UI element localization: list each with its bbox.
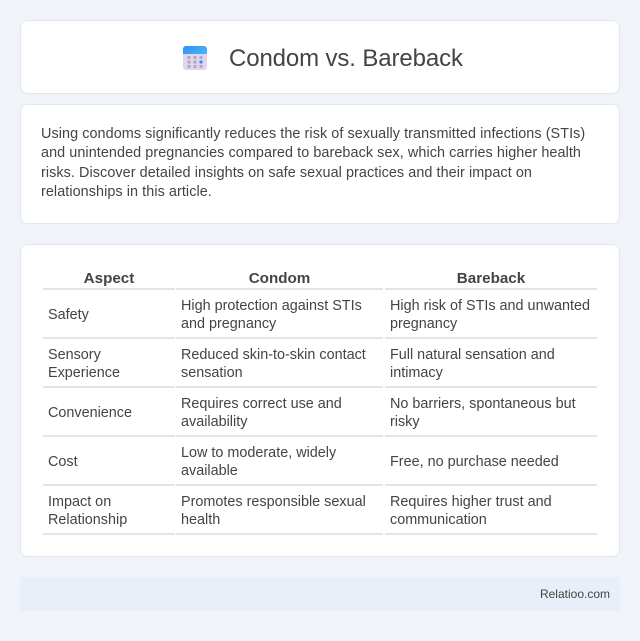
panel: title card <box>20 20 620 94</box>
row: sensory experience: Sensory <box>48 347 101 363</box>
row: impact on relationship: Relationship <box>48 512 127 528</box>
row: cost: Cost <box>48 454 78 470</box>
icon: calendar <box>183 46 207 70</box>
intro paragraph: Using condoms significantly reduces the risk of sexually transmitted infections (STIs) <box>41 126 585 142</box>
intro paragraph: risks. Discover detailed insights on safe sexual practices and their impact on <box>41 165 532 181</box>
intro paragraph: relationships in this article. <box>41 184 212 200</box>
row: impact on relationship: health <box>181 512 220 528</box>
row: impact on relationship <box>43 494 597 535</box>
row: sensory experience: Reduced skin-to-skin contact <box>181 347 366 363</box>
panel: intro text <box>20 104 620 224</box>
row: impact on relationship: Impact on <box>48 494 111 510</box>
table header: Bareback <box>457 270 525 287</box>
table header: Condom <box>249 270 310 287</box>
table header <box>43 270 597 290</box>
row: cost: Low to moderate, widely <box>181 445 336 461</box>
row: safety <box>43 298 597 339</box>
intro paragraph: and unintended pregnancies compared to bareback sex, which carries higher health <box>41 145 581 161</box>
row: impact on relationship: Requires higher trust and <box>390 494 552 510</box>
row: safety: pregnancy <box>390 316 457 332</box>
row: sensory experience: sensation <box>181 365 243 381</box>
intro paragraph <box>41 126 585 200</box>
title: Condom vs. Bareback <box>229 45 463 72</box>
row: safety: Safety <box>48 307 89 323</box>
row: safety: High protection against STIs <box>181 298 362 314</box>
row: cost: available <box>181 463 238 479</box>
row: sensory experience: Experience <box>48 365 120 381</box>
row: convenience: Requires correct use and <box>181 396 342 412</box>
row: cost <box>43 445 597 486</box>
row: sensory experience: Full natural sensation and <box>390 347 555 363</box>
row: convenience: availability <box>181 414 247 430</box>
panel: comparison table <box>20 244 620 557</box>
row: safety: High risk of STIs and unwanted <box>390 298 590 314</box>
row: convenience: Convenience <box>48 405 132 421</box>
row: convenience: No barriers, spontaneous but <box>390 396 576 412</box>
row: convenience: risky <box>390 414 420 430</box>
row: sensory experience: intimacy <box>390 365 443 381</box>
row: impact on relationship: communication <box>390 512 487 528</box>
row: cost: Free, no purchase needed <box>390 454 559 470</box>
row: convenience <box>43 396 597 437</box>
row: impact on relationship: Promotes responsible sexual <box>181 494 366 510</box>
table header: Aspect <box>84 270 134 287</box>
footer text: Relatioo.com <box>540 587 610 601</box>
row: safety: and pregnancy <box>181 316 276 332</box>
footer <box>20 577 620 611</box>
row: sensory experience <box>43 347 597 388</box>
